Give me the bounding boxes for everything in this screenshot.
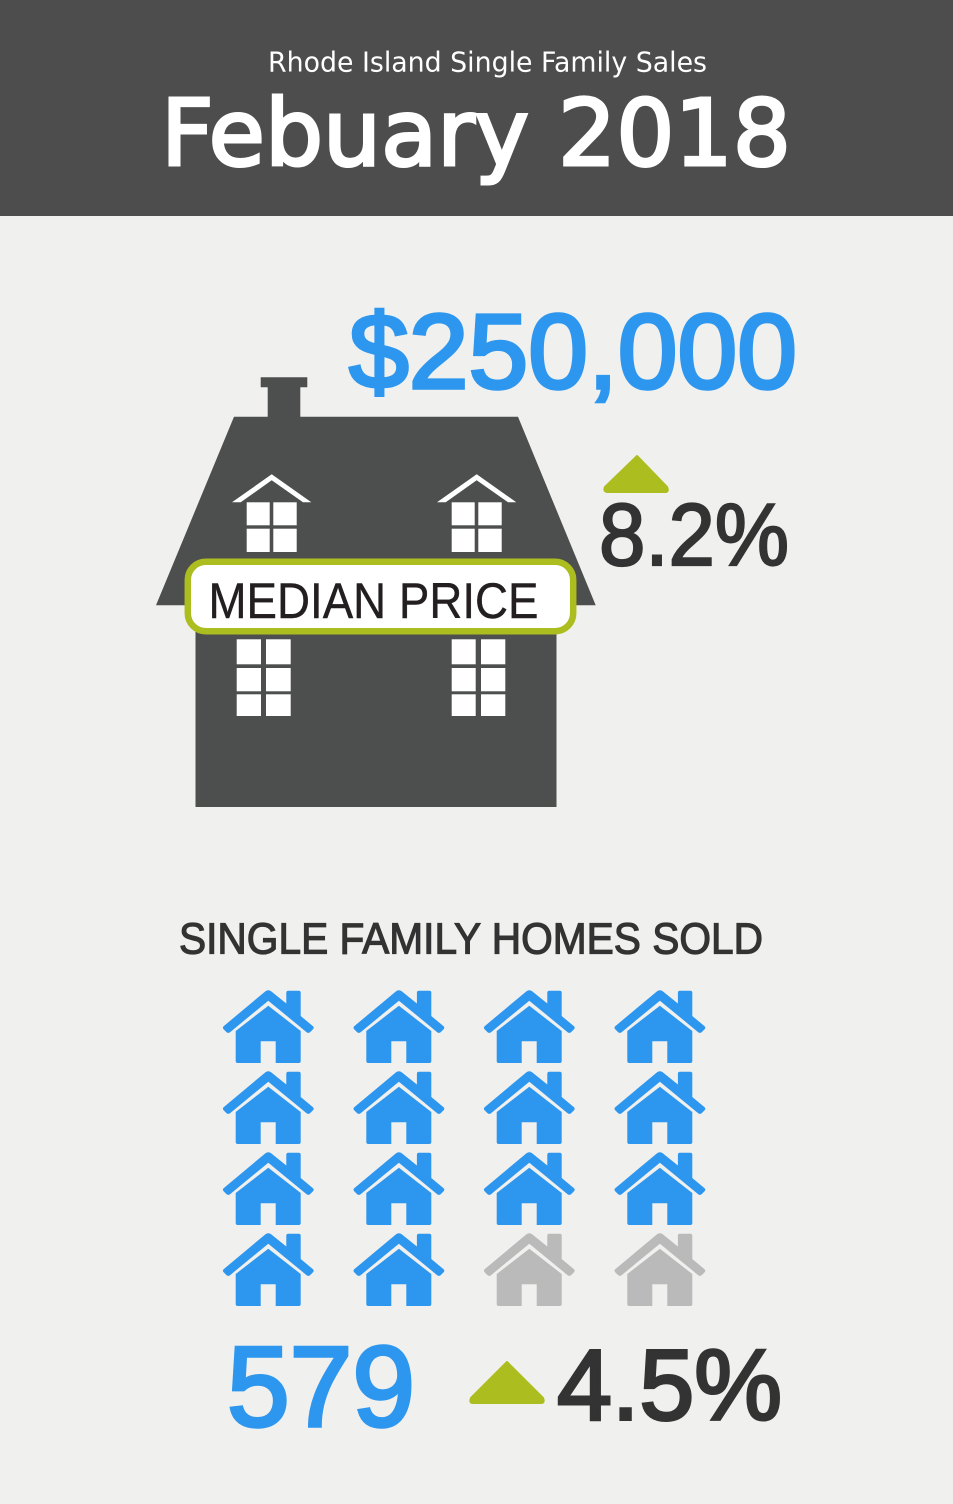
sold home icons — [223, 990, 705, 1306]
header banner — [0, 0, 953, 216]
chimney — [261, 377, 307, 420]
illustration: house with median price label — [156, 377, 596, 807]
house body — [196, 600, 556, 807]
unfilled home icons — [484, 1233, 705, 1306]
lower right window — [452, 639, 505, 716]
price change percentage: 8.2% — [599, 485, 789, 584]
title: Febuary 2018 — [161, 80, 791, 187]
right dormer window — [437, 474, 516, 552]
homes sold heading: SINGLE FAMILY HOMES SOLD — [179, 914, 763, 964]
subtitle: Rhode Island Single Family Sales — [268, 46, 707, 78]
median price label: MEDIAN PRICE — [208, 573, 538, 629]
homes sold change percentage: 4.5% — [557, 1330, 782, 1442]
homes sold change arrow — [470, 1362, 544, 1403]
pictogram: homes sold icons — [223, 990, 705, 1306]
lower left window — [237, 639, 291, 716]
median price value: $250,000 — [349, 293, 797, 411]
roof — [156, 417, 596, 605]
homes sold value: 579 — [227, 1324, 415, 1451]
price change arrow — [604, 456, 668, 492]
left dormer window — [232, 474, 311, 552]
